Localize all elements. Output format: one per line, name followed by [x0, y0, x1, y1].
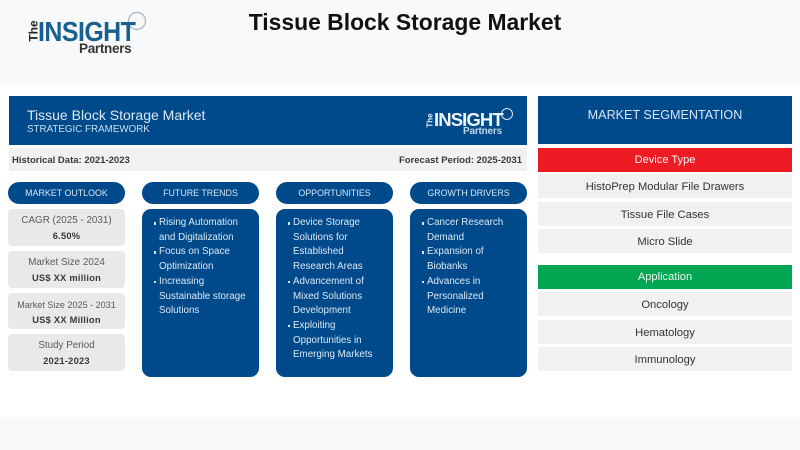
segment: Micro Slide: Micro Slide [637, 236, 693, 248]
panel: future trends: Solutions [159, 305, 199, 316]
panel: growth drivers: Personalized [427, 291, 484, 302]
logo: white Insight Partners: INSIGHT [434, 109, 503, 130]
panel: growth drivers: Expansion of [427, 246, 484, 257]
segment: Oncology: Oncology [641, 298, 689, 310]
heading: market outlook [8, 182, 125, 204]
panel: future trends: Rising Automation [159, 217, 238, 228]
segment: Micro Slide [538, 229, 792, 253]
stat: CAGR: CAGR (2025 - 2031) [21, 215, 112, 226]
logo: The Insight Partners: Partners [79, 41, 131, 56]
period bar [9, 148, 527, 171]
bottom footer band [0, 417, 800, 450]
segment: Hematology: Hematology [635, 326, 695, 338]
panel: opportunities: Research Areas [293, 261, 363, 272]
framework heading: Tissue Block Storage Market [27, 107, 205, 123]
framework subheading: STRATEGIC FRAMEWORK [27, 124, 150, 135]
panel: future trends: Optimization [159, 261, 213, 272]
panel: growth drivers: Demand [427, 232, 464, 243]
panel: future trends: Sustainable storage [159, 291, 246, 302]
panel: opportunities: Mixed Solutions [293, 291, 362, 302]
segment: Hematology [538, 320, 792, 344]
stat: study period [8, 334, 125, 371]
panel: growth drivers: Cancer Research [427, 217, 503, 228]
panel: opportunities: Advancement of [293, 276, 364, 287]
stat: study period: Study Period [38, 340, 95, 351]
segment: Tissue File Cases: Tissue File Cases [621, 208, 709, 220]
segment: Oncology [538, 292, 792, 316]
stat: market size 2024: US$ XX million [32, 272, 101, 282]
segment header: device type: Device Type [635, 154, 695, 166]
panel: opportunities [276, 209, 393, 377]
heading: growth drivers [410, 182, 527, 204]
logo: The Insight Partners: INSIGHT [38, 16, 135, 47]
title: Tissue Block Storage Market [249, 9, 561, 35]
panel: future trends [142, 209, 259, 377]
top header band [0, 0, 800, 84]
heading: future trends [142, 182, 259, 204]
panel: opportunities: Established [293, 246, 344, 257]
forecast period label: Forecast Period: 2025-2031 [399, 155, 522, 166]
panel: future trends: Focus on Space [159, 246, 230, 257]
stat: market size 2025-2031: US$ XX Million [32, 314, 101, 324]
panel: opportunities: Opportunities in [293, 335, 362, 346]
panel: growth drivers: Biobanks [427, 261, 467, 272]
logo: white Insight Partners: Partners [463, 126, 502, 137]
stat: CAGR [8, 209, 125, 246]
panel: strategic framework header [9, 96, 527, 145]
panel: future trends: Increasing [159, 276, 204, 287]
segment: Immunology: Immunology [635, 354, 695, 366]
logo: white Insight Partners: The [426, 113, 435, 128]
logo: white Insight Partners [426, 108, 513, 137]
stat: CAGR: 6.50% [53, 230, 80, 240]
segment header: device type [538, 148, 792, 172]
segment: Tissue File Cases [538, 202, 792, 226]
heading: future trends: FUTURE TRENDS [163, 188, 238, 198]
panel: growth drivers [410, 209, 527, 377]
panel: growth drivers: Medicine [427, 305, 466, 316]
segment: HistoPrep Modular File Drawers [538, 174, 792, 198]
stat: market size 2025-2031: Market Size 2025 - 2031 [17, 300, 116, 310]
segment header: application [538, 265, 792, 289]
stat: market size 2024: Market Size 2024 [28, 257, 105, 268]
panel: future trends: and Digitalization [159, 232, 234, 243]
logo: The Insight Partners [27, 12, 146, 56]
heading: growth drivers: GROWTH DRIVERS [427, 188, 510, 198]
panel: opportunities: Solutions for [293, 232, 347, 243]
segment header: application: Application [638, 271, 692, 283]
stat: market size 2024 [8, 251, 125, 288]
heading: market segmentation: MARKET SEGMENTATION [588, 108, 742, 122]
panel: opportunities: Emerging Markets [293, 349, 372, 360]
heading: opportunities [276, 182, 393, 204]
panel: opportunities: Device Storage [293, 217, 360, 228]
heading: market segmentation [538, 96, 792, 144]
historical data label: Historical Data: 2021-2023 [12, 155, 130, 166]
segment: Immunology [538, 347, 792, 371]
panel: opportunities: Development [293, 305, 351, 316]
stat: study period: 2021-2023 [43, 356, 90, 366]
logo: The Insight Partners: The [27, 20, 41, 42]
panel: growth drivers: Advances in [427, 276, 480, 287]
segment: HistoPrep Modular File Drawers: HistoPrep Modular File Drawers [586, 180, 744, 192]
heading: opportunities: OPPORTUNITIES [298, 188, 371, 198]
heading: market outlook: MARKET OUTLOOK [25, 188, 108, 198]
panel: opportunities: Exploiting [293, 320, 335, 331]
stat: market size 2025-2031 [8, 293, 125, 329]
